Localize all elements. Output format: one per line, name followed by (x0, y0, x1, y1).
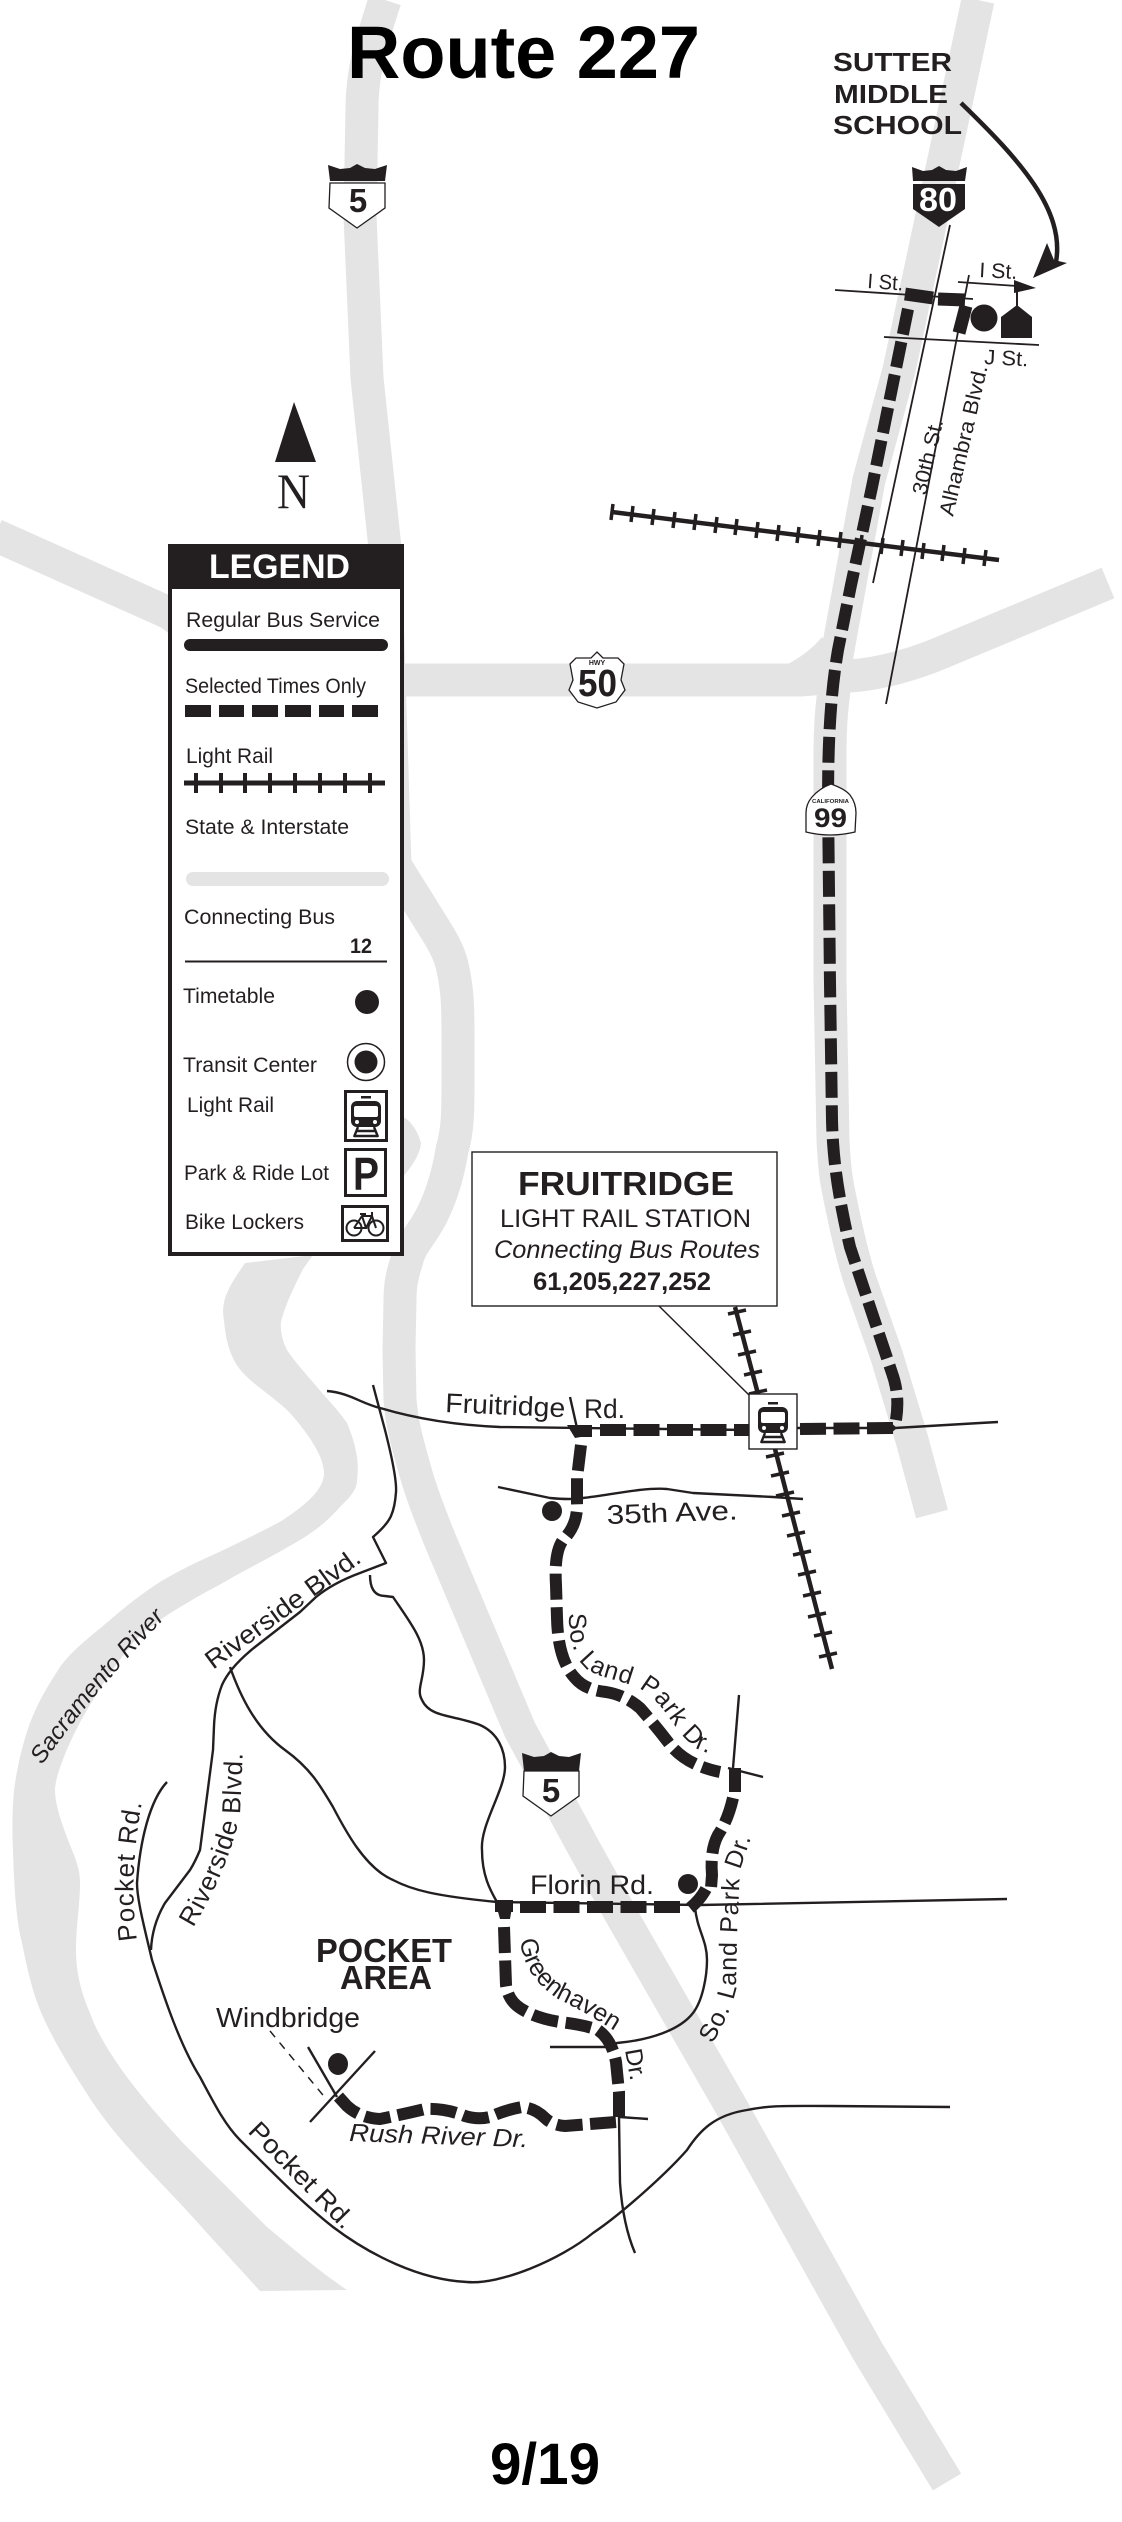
callout: Fruitridge light rail station: 61,205,227,252 (533, 1268, 711, 1296)
highway: US 50 (0, 535, 1108, 680)
label: Pocket Area: AREA (340, 1959, 432, 1996)
streets: thin road network (137, 225, 1039, 2282)
street labels: Rd. (584, 1394, 625, 1424)
highway: Interstate 5 (360, 0, 947, 2482)
shield: Interstate 80: 80 (919, 181, 957, 218)
label: Sutter Middle School: SCHOOL (833, 110, 962, 140)
street labels (32, 259, 1029, 2235)
bus route 227: dashed service line (337, 294, 966, 2126)
street labels: Florin Rd. (530, 1870, 654, 1900)
light rail line: Fruitridge corridor (728, 1307, 837, 1669)
shield: US 50 (569, 652, 625, 708)
callout: Fruitridge light rail station: FRUITRIDGE (518, 1165, 734, 1202)
legend: park and ride lot: P (353, 1148, 379, 1200)
icon: Fruitridge light rail station (749, 1394, 797, 1449)
legend: park and ride lot: Park & Ride Lot (184, 1162, 329, 1185)
legend: timetable (183, 985, 379, 1014)
callout: Fruitridge light rail station: LIGHT RAIL STATION (500, 1205, 751, 1233)
label: Pocket Area (316, 1932, 452, 1996)
shield: Interstate 80 (912, 166, 967, 227)
street labels: Alhambra Blvd. (935, 363, 993, 518)
legend: light rail station: Light Rail (187, 1094, 274, 1117)
river: Sacramento River (12, 1115, 421, 2291)
legend: transit center (183, 1044, 384, 1080)
legend: bike lockers: Bike Lockers (185, 1211, 304, 1234)
legend: park and ride lot (184, 1148, 386, 1200)
label: Sutter Middle School: MIDDLE (834, 79, 948, 109)
street labels: Sacramento River (32, 1608, 162, 1763)
street labels: 30th St. (908, 417, 948, 497)
shield: US 50: HWY (589, 660, 605, 667)
callout: Fruitridge light rail station (472, 1152, 777, 1395)
street labels: Dr. (619, 2046, 651, 2083)
label: Pocket Area: POCKET (316, 1932, 452, 1969)
street labels: Windbridge (216, 2002, 360, 2033)
title: Route 227 (347, 11, 700, 94)
label: Sutter Middle School (833, 47, 962, 140)
legend: bike lockers (185, 1206, 388, 1240)
panel: legend (168, 544, 404, 1254)
legend: timetable: Timetable (183, 985, 275, 1008)
legend: transit center: Transit Center (183, 1054, 317, 1077)
arrow: to Sutter Middle School (961, 103, 1067, 278)
street labels: I St. (979, 259, 1018, 284)
label: Sutter Middle School: SUTTER (833, 47, 952, 77)
legend: state and interstate: State & Interstate (185, 816, 349, 839)
street labels: Pocket Rd. (243, 2115, 361, 2235)
light rail line: upper crossing (611, 504, 999, 566)
callout: Fruitridge light rail station: Connecting Bus Routes (494, 1236, 760, 1264)
legend: selected times only: Selected Times Only (185, 675, 366, 698)
street labels: I St. (867, 270, 904, 295)
street labels: Greenhaven (521, 1939, 619, 2030)
legend header (168, 544, 404, 589)
street labels: Fruitridge (445, 1388, 566, 1423)
icon: north arrow: N (277, 463, 310, 519)
highway: Interstate 80 and State 99 (830, 0, 978, 1514)
street labels: Pocket Rd. (114, 1804, 142, 1940)
legend: regular bus service (184, 609, 388, 651)
street labels: Riverside Blvd. (178, 1756, 243, 1926)
shield: Interstate 5 south (522, 1752, 581, 1816)
legend: light rail line: Light Rail (186, 745, 273, 768)
street labels: J St. (984, 346, 1029, 371)
street labels: 35th Ave. (606, 1495, 738, 1530)
legend: regular bus service: Regular Bus Service (186, 609, 380, 632)
street labels: So. Land Park Dr. (700, 1839, 750, 2042)
shield: California 99: 99 (814, 803, 847, 833)
shield: Interstate 5 south: 5 (542, 1772, 560, 1809)
legend header: LEGEND (209, 548, 350, 586)
shield: California 99 (806, 784, 856, 835)
shield: Interstate 5 north (328, 164, 387, 228)
legend: connecting bus (184, 906, 387, 962)
shield: US 50: 50 (578, 663, 617, 705)
legend: light rail line (184, 745, 385, 793)
legend: state and interstate (185, 816, 389, 886)
street labels: Riverside Blvd. (199, 1542, 366, 1675)
shield: California 99: CALIFORNIA (812, 799, 849, 805)
street labels: Rush River Dr. (349, 2119, 529, 2153)
street labels: So. Land Park Dr. (568, 1614, 708, 1753)
legend: light rail station (187, 1092, 386, 1140)
legend: selected times only (185, 675, 378, 717)
icon: north arrow (275, 402, 316, 519)
icon: Sutter Middle School with flag (1001, 280, 1036, 338)
timetable stops (328, 304, 998, 2075)
legend: connecting bus: 12 (350, 935, 372, 958)
shield: Interstate 5 north: 5 (349, 182, 367, 219)
date: 9/19: 9/19 (490, 2432, 600, 2497)
legend: connecting bus: Connecting Bus (184, 906, 335, 929)
